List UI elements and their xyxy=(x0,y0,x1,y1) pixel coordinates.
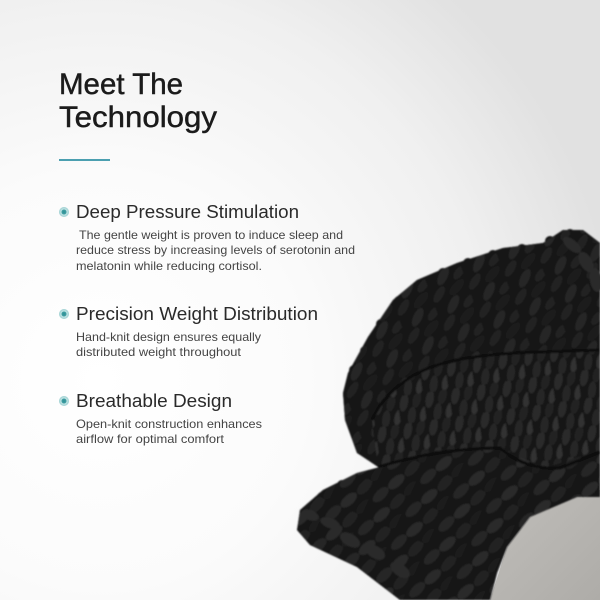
photo: concrete support xyxy=(490,490,600,600)
description xyxy=(76,330,261,359)
description: The gentle weight is proven to induce sleep and xyxy=(79,228,343,242)
description: melatonin while reducing cortisol. xyxy=(76,259,262,273)
description: reduce stress by increasing levels of serotonin and xyxy=(76,243,355,257)
description: Hand-knit design ensures equally xyxy=(76,330,261,344)
description: airflow for optimal comfort xyxy=(76,432,225,446)
heading: Breathable Design xyxy=(76,391,232,411)
title xyxy=(59,68,217,134)
heading: Precision Weight Distribution xyxy=(76,304,318,324)
description: Open-knit construction enhances xyxy=(76,417,262,431)
accent divider xyxy=(59,159,110,161)
feature: deep pressure stimulation xyxy=(59,202,355,273)
description xyxy=(76,417,262,446)
heading: Deep Pressure Stimulation xyxy=(76,202,299,222)
description: distributed weight throughout xyxy=(76,345,242,359)
feature: breathable design xyxy=(59,391,262,446)
icon: bullet xyxy=(59,309,69,319)
photo: chunky knit blanket xyxy=(290,220,600,600)
title: Meet The xyxy=(59,68,183,101)
feature: precision weight distribution xyxy=(59,304,318,359)
title: Technology xyxy=(59,101,217,134)
icon: bullet xyxy=(59,396,69,406)
description xyxy=(76,228,355,273)
icon: bullet xyxy=(59,207,69,217)
